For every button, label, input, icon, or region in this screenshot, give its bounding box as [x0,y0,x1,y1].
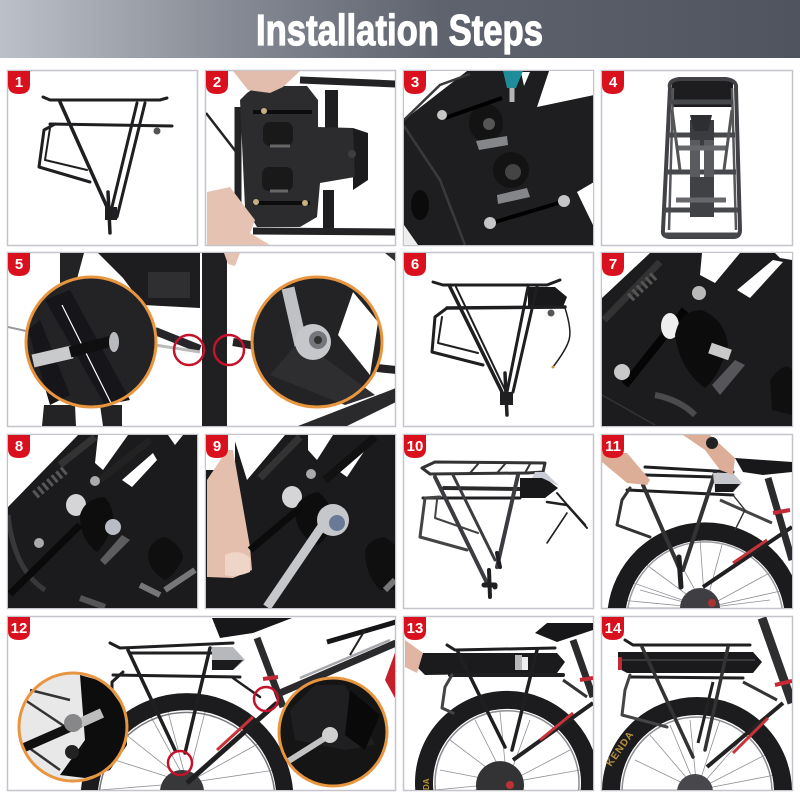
badge 4 [602,71,624,94]
plate close-up photo [404,71,594,245]
badge 2 [206,71,228,94]
panel: step 10 rack assembled with battery base [404,434,594,608]
badge 13: 13 [407,620,423,637]
panel: step 1 bare rack [8,70,198,246]
badge 11 [602,435,624,458]
panel: step 4 top view of rack [602,70,792,246]
badge 12 [8,617,30,640]
red locator circles [174,335,244,365]
bike and rack photo [602,435,794,612]
badge 13 [404,617,426,640]
panel: step 6 rack with battery base and wire [404,252,594,426]
panel: step 5 fixing bolts with detail magnifiers [8,252,396,427]
title: Installation Steps [256,6,543,55]
tightening photo [206,435,395,608]
badge 5 [8,253,30,276]
panel: step 14 battery installed [602,616,792,792]
badge 2: 2 [213,74,221,91]
badge 10 [404,435,426,458]
badge 4: 4 [609,74,618,91]
badge 7 [602,253,624,276]
badge 9 [206,435,228,458]
badge 8: 8 [15,438,23,455]
mount close-up photo [8,435,197,608]
panel: step 9 tightening with wrench [206,434,396,608]
panel: step 12 rack installed on bike with detail magnifiers [8,616,396,792]
badge 3: 3 [411,74,419,91]
badge 1 [8,71,30,94]
tyre lettering: DA [422,778,431,790]
panel: step 3 close-up of mount [404,70,594,246]
badge 6: 6 [411,256,419,273]
badge 9: 9 [213,438,221,455]
panel: step 2 mounting plate held in hands [206,70,396,246]
panel: step 13 sliding battery in [404,616,594,792]
badge 5: 5 [15,256,23,273]
bike frame background [8,253,396,427]
rack illustration [39,97,172,233]
panel: step 7 bolt through mount [602,252,792,426]
plate photo [206,71,396,245]
rack top view [663,77,740,237]
right magnifier: bolt in frame [279,678,387,786]
right magnifier: wrench [252,277,382,407]
bike and battery photo [405,623,593,792]
left magnifier: screwdriver [26,277,156,407]
bike and battery photo [604,618,792,792]
badge 14 [602,617,624,640]
badge 7: 7 [609,256,617,273]
rack illustration [420,462,587,597]
red locator circles [168,687,278,775]
rack illustration [432,280,570,415]
panel: step 8 rod and nut on mount [8,434,198,608]
panel: step 11 hands fitting rack to bike [602,434,794,612]
badge 3 [404,71,426,94]
mount close-up photo [602,253,792,426]
badge 1: 1 [15,74,23,91]
badge 12: 12 [11,620,27,637]
badge 11: 11 [605,438,621,455]
badge 8 [8,435,30,458]
tyre lettering: KENDA [604,729,637,769]
badge 10: 10 [407,438,423,455]
badge 14: 14 [605,620,622,637]
title banner [0,0,800,58]
bike photo [89,618,396,792]
left magnifier: threaded axle [19,673,127,781]
badge 6 [404,253,426,276]
